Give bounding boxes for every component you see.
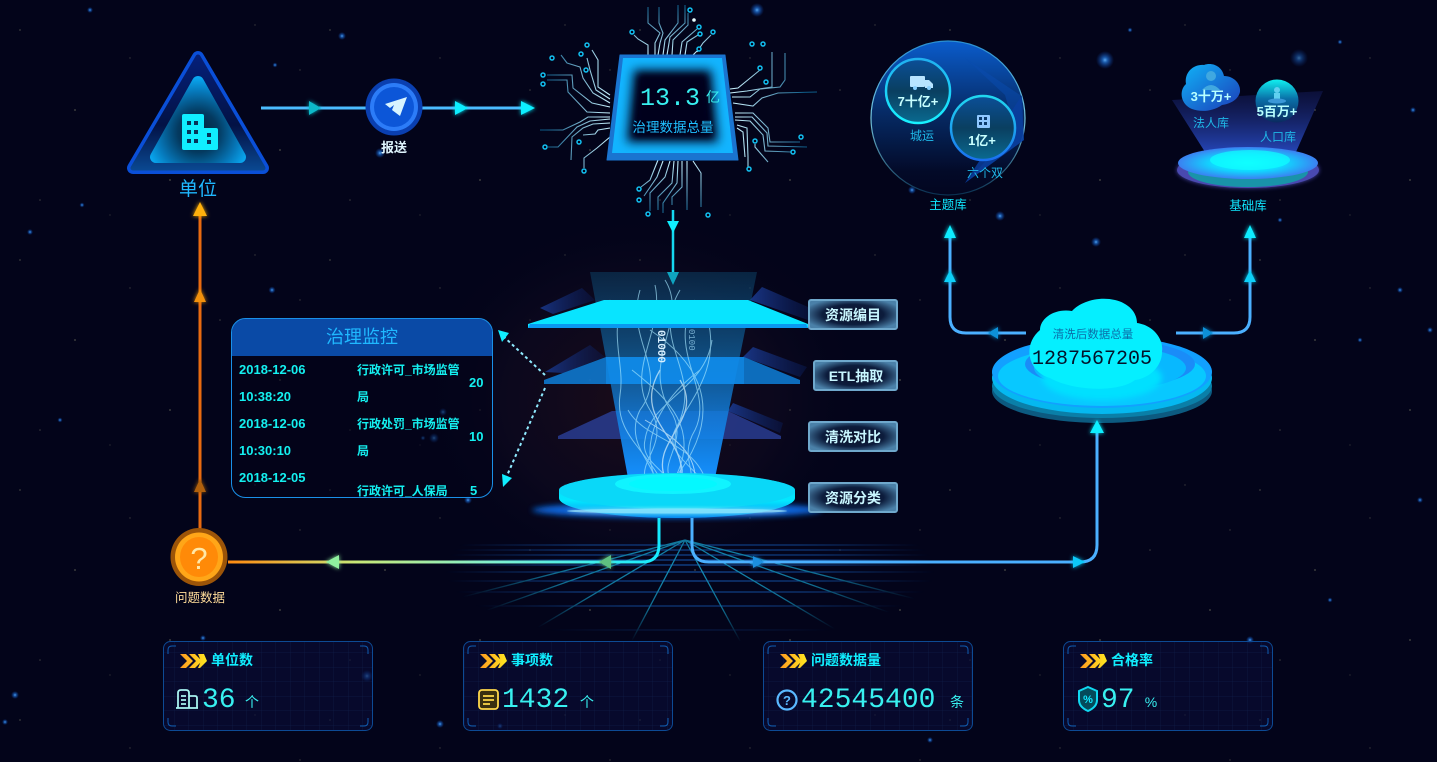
icon: chevrons	[1080, 654, 1107, 668]
table rows: 2018-12-06	[239, 362, 306, 377]
table rows: 局	[357, 444, 369, 458]
table rows: 5	[470, 483, 477, 498]
card: item count: 个	[580, 694, 594, 710]
icon: chevrons	[480, 654, 507, 668]
card: problem data volume: 条	[950, 694, 964, 710]
icon: chevrons	[180, 654, 207, 668]
card title: 问题数据量	[811, 652, 881, 668]
arrow: classification to cloud	[692, 420, 1104, 568]
panel: base library	[1172, 64, 1323, 213]
value: 97: 97	[1101, 685, 1135, 716]
table rows: 行政许可_市场监管	[357, 362, 460, 377]
icon: shield: %	[1083, 694, 1093, 706]
table rows	[239, 362, 483, 498]
panel: governance monitoring table: 治理监控	[326, 327, 398, 347]
tag: resource catalog	[809, 300, 897, 329]
label: cleaned total: 清洗后数据总量	[1053, 327, 1133, 341]
arrow: dashed links to table	[498, 330, 545, 487]
tag: resource catalog: 资源编目	[825, 307, 881, 323]
arrow: chip to funnel	[667, 210, 679, 285]
bubble: six double	[951, 96, 1015, 160]
bubble: city ops: 7十亿+	[898, 94, 939, 109]
bubble: city ops	[886, 59, 950, 123]
label: legal persons: 法人库	[1193, 115, 1229, 130]
ball: population: 5百万+	[1257, 104, 1298, 119]
table rows: 行政处罚_市场监管	[357, 416, 460, 431]
card: item count	[464, 642, 672, 730]
card title: 事项数	[511, 652, 553, 668]
table rows: 10:30:10	[239, 443, 291, 458]
panel: processing funnel	[528, 272, 822, 518]
cloud: legal persons: 3十万+	[1191, 89, 1232, 104]
value: 36: 36	[202, 685, 236, 716]
table rows: 行政许可_人保局	[357, 483, 448, 498]
icon: paper plane	[385, 97, 407, 116]
heading: base library: 基础库	[1229, 198, 1267, 213]
label: total governed data: 治理数据总量	[632, 120, 714, 135]
heading: theme library: 主题库	[929, 197, 967, 212]
node: problem data: 问题数据	[175, 590, 225, 605]
panel: reporting unit	[133, 57, 263, 200]
cloud	[1029, 299, 1162, 389]
card title: 合格率	[1111, 652, 1153, 668]
card: pass rate	[1064, 642, 1272, 730]
base platform	[532, 473, 822, 518]
light cone	[590, 272, 757, 478]
layered disc	[992, 336, 1212, 423]
label: six double: 六个双	[967, 166, 1003, 180]
cloud: legal persons	[1182, 64, 1240, 111]
table rows: 2018-12-05	[239, 470, 306, 485]
arrow: classification to problem data	[228, 518, 659, 569]
binary text	[654, 329, 696, 363]
icon: chevrons	[780, 654, 807, 668]
icon: question	[778, 690, 796, 710]
card title: 单位数	[211, 652, 253, 668]
tag: clean compare	[809, 422, 897, 451]
table rows: 10	[469, 429, 483, 444]
bubble: six double: 1亿+	[968, 133, 996, 148]
arrow: cloud to theme library	[944, 225, 1026, 339]
icon: shield	[1079, 687, 1097, 711]
value: cleaned total: 1287567205	[1032, 348, 1152, 371]
card: problem data volume	[764, 642, 972, 730]
table header	[232, 319, 492, 356]
ball: population	[1256, 80, 1298, 122]
heading: unit: 单位	[179, 178, 217, 200]
icon: unit triangle	[133, 57, 263, 168]
arrow: problem data to unit	[193, 202, 207, 530]
circuit traces	[540, 5, 817, 217]
node: report: 报送	[381, 140, 407, 155]
tag: ETL	[814, 361, 897, 390]
panel: governance monitoring table	[232, 318, 492, 498]
panel: data chip: 亿	[706, 89, 720, 105]
arrow: report flow to chip	[261, 101, 535, 115]
tag: classification: 资源分类	[825, 490, 881, 506]
tag: classification	[809, 483, 897, 512]
back flaps	[540, 287, 808, 433]
table rows: 2018-12-06	[239, 416, 306, 431]
value: 13.3: 13.3	[640, 84, 700, 113]
table rows: 局	[357, 390, 369, 404]
icon: document	[479, 690, 498, 709]
panel: data chip	[540, 5, 817, 217]
node: problem data	[170, 528, 228, 605]
perspective grid floor	[455, 539, 925, 640]
panel: cleaned data cloud	[992, 299, 1212, 423]
disc	[1177, 147, 1319, 188]
light beam	[1172, 91, 1323, 152]
card: pass rate: %	[1145, 694, 1157, 710]
tag: clean compare: 清洗对比	[825, 429, 881, 445]
panel: theme library	[871, 41, 1025, 212]
icon: question: ?	[783, 693, 791, 708]
arrow: cloud to base library	[1176, 225, 1256, 339]
label: population: 人口库	[1260, 129, 1296, 144]
card: unit count: 个	[245, 694, 259, 710]
binary text: 01000	[654, 330, 666, 363]
data streams	[617, 280, 712, 478]
plate 3	[558, 411, 781, 439]
value: 42545400: 42545400	[801, 685, 935, 716]
node: problem data: ?	[190, 541, 208, 576]
node: report	[366, 78, 422, 155]
plate 1	[528, 300, 808, 328]
chip body	[607, 55, 738, 160]
table rows: 10:38:20	[239, 389, 291, 404]
globe	[871, 41, 1025, 195]
table rows: 20	[469, 375, 483, 390]
card: unit count	[164, 642, 372, 730]
binary text: 0100	[686, 329, 696, 351]
value: 1432: 1432	[502, 685, 569, 716]
plate 2	[544, 357, 800, 384]
icon: building	[176, 690, 198, 708]
tag: ETL: ETL抽取	[829, 368, 883, 384]
label: city ops: 城运	[910, 129, 934, 143]
